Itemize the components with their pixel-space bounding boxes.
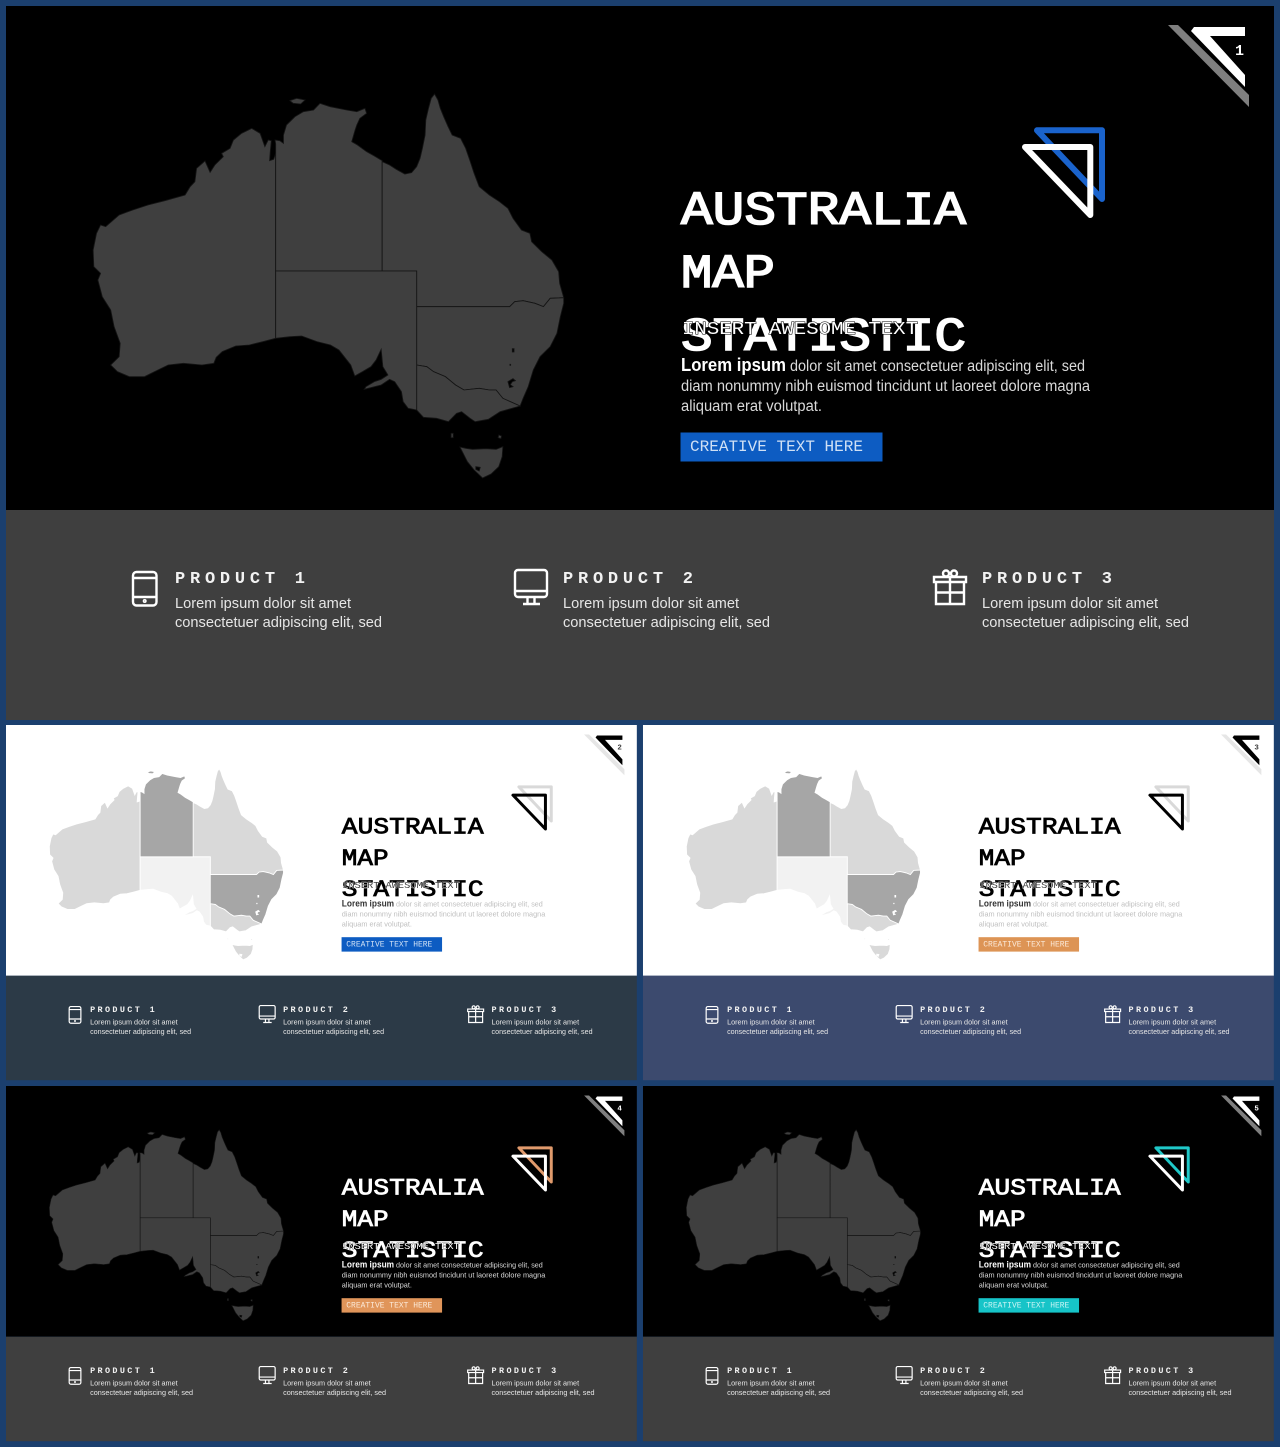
slide 5 product 2: Lorem ipsum dolor sit amet [920, 1378, 1009, 1387]
slide 1 product 3 [934, 570, 1189, 631]
slide 5 product 2 [896, 1366, 1023, 1397]
slide 5 title: AUSTRALIA [979, 1176, 1122, 1202]
slide 2 product 1: Lorem ipsum dolor sit amet [90, 1017, 179, 1026]
slide 3 map of Australia [686, 769, 920, 960]
slide 5 subtitle: INSERT AWESOME TEXT [979, 1242, 1097, 1252]
slide 5 button [979, 1298, 1079, 1313]
slide 5 triangle icon [1150, 1148, 1188, 1190]
icon: monitor [515, 570, 547, 604]
slide 5 title [979, 1176, 1122, 1265]
slide 4: dark slide with orange accent [6, 1086, 637, 1441]
slide 3 product 3 [1105, 1005, 1230, 1036]
slide 5 product 1: PRODUCT 1 [727, 1366, 792, 1376]
slide 4 product 3 [468, 1366, 595, 1397]
slide 1 paragraph: diam nonummy nibh euismod tincidunt ut laoreet dolore magna [681, 378, 1090, 395]
icon: tablet [69, 1007, 81, 1023]
slide 4 product 3: consectetuer adipiscing elit, sed [492, 1388, 595, 1397]
slide 2 footer panel [6, 976, 637, 1080]
slide 3 paragraph: diam nonummy nibh euismod tincidunt ut laoreet dolore magna [979, 910, 1183, 919]
slide 5 footer panel [643, 1337, 1274, 1441]
slide 2 corner emblem: 2 [617, 744, 622, 752]
slide 1 title: STATISTIC [681, 312, 966, 365]
slide 4 corner emblem: 4 [617, 1105, 622, 1113]
slide 2 product 2: consectetuer adipiscing elit, sed [283, 1027, 384, 1036]
slide 5 map of Australia [686, 1130, 920, 1321]
slide 3 button [979, 937, 1079, 952]
slide 2 paragraph: diam nonummy nibh euismod tincidunt ut laoreet dolore magna [342, 910, 546, 919]
slide 4 product 2: PRODUCT 2 [283, 1366, 348, 1376]
slide 3 paragraph: dolor sit amet consectetuer adipiscing elit, sed [1033, 900, 1180, 909]
slide 4 paragraph [342, 1260, 546, 1289]
slide 3 top panel [643, 725, 1274, 976]
slide 5 title: STATISTIC [979, 1239, 1121, 1265]
slide 2 map of Australia [49, 769, 283, 960]
slide 4 paragraph: dolor sit amet consectetuer adipiscing elit, sed [396, 1261, 543, 1270]
slide 2 product 3: consectetuer adipiscing elit, sed [492, 1027, 593, 1036]
slide 5 product 3: consectetuer adipiscing elit, sed [1129, 1388, 1232, 1397]
slide 2 corner emblem [584, 734, 624, 775]
slide 4 triangle icon [513, 1148, 551, 1190]
slide 4 paragraph: diam nonummy nibh euismod tincidunt ut laoreet dolore magna [342, 1271, 546, 1280]
slide 1 button: CREATIVE TEXT HERE [690, 438, 863, 456]
slide 5 product 1: Lorem ipsum dolor sit amet [727, 1378, 816, 1387]
icon: gift [1105, 1006, 1121, 1023]
slide 2 triangle icon [513, 787, 551, 829]
slide 2 paragraph [342, 899, 546, 928]
icon: tablet [69, 1368, 81, 1384]
slide 3 button: CREATIVE TEXT HERE [983, 940, 1070, 949]
slide 4 product 3: PRODUCT 3 [492, 1366, 556, 1376]
slide 3 product 1 [706, 1005, 828, 1036]
slide 3 product 3: Lorem ipsum dolor sit amet [1129, 1017, 1217, 1026]
slide 2 title: STATISTIC [342, 878, 484, 904]
slide 3 title [979, 815, 1122, 904]
slide 3 product 3: consectetuer adipiscing elit, sed [1129, 1027, 1230, 1036]
slide 2 product 1 [69, 1005, 191, 1036]
slide 5 corner emblem [1221, 1095, 1261, 1136]
icon: tablet [706, 1007, 718, 1023]
slide 2 button [342, 937, 442, 952]
slide 4 product 1: consectetuer adipiscing elit, sed [90, 1388, 193, 1397]
slide 4 paragraph: aliquam erat volutpat. [342, 1280, 412, 1289]
slide 5 paragraph: Lorem ipsum [979, 1260, 1031, 1270]
icon: gift [468, 1006, 484, 1023]
slide 1 product 1 [133, 570, 382, 631]
slide 1 corner emblem: 1 [1235, 43, 1244, 60]
slide 5 paragraph: diam nonummy nibh euismod tincidunt ut laoreet dolore magna [979, 1271, 1183, 1280]
slide 3 product 3: PRODUCT 3 [1129, 1005, 1193, 1015]
slide 3 product 2: consectetuer adipiscing elit, sed [920, 1027, 1021, 1036]
slide 2 product 1: PRODUCT 1 [90, 1005, 155, 1015]
slide 3 subtitle: INSERT AWESOME TEXT [979, 881, 1097, 891]
slide 2 product 3: PRODUCT 3 [492, 1005, 556, 1015]
slide 4 map of Australia [49, 1130, 283, 1321]
slide 1 map of Australia [93, 94, 564, 478]
slide 1 product 3: Lorem ipsum dolor sit amet [982, 595, 1159, 612]
slide 5 paragraph: aliquam erat volutpat. [979, 1280, 1049, 1289]
slide 2 title [342, 815, 485, 904]
slide 2 title: AUSTRALIA [342, 815, 485, 841]
icon: monitor [896, 1006, 912, 1023]
slide 3 title: AUSTRALIA [979, 815, 1122, 841]
slide 4 product 3: Lorem ipsum dolor sit amet [492, 1378, 580, 1387]
slide 1 product 2: consectetuer adipiscing elit, sed [563, 614, 770, 631]
slide 2 top panel [6, 725, 637, 976]
slide 4 title: STATISTIC [342, 1239, 484, 1265]
icon: tablet [706, 1368, 718, 1384]
slide 4 subtitle: INSERT AWESOME TEXT [342, 1242, 460, 1252]
slide 2 paragraph: aliquam erat volutpat. [342, 919, 412, 928]
slide 3 footer panel [643, 976, 1274, 1080]
icon: gift [934, 570, 966, 604]
slide 1 subtitle: INSERT AWESOME TEXT [682, 320, 918, 340]
slide 1 product 2 [515, 570, 770, 631]
slide 5 product 2: consectetuer adipiscing elit, sed [920, 1388, 1023, 1397]
slide 3 paragraph: aliquam erat volutpat. [979, 919, 1049, 928]
slide 3 title: STATISTIC [979, 878, 1121, 904]
slide 3 title: MAP [979, 847, 1026, 873]
slide 1 title [681, 186, 967, 365]
slide 4 button: CREATIVE TEXT HERE [346, 1301, 433, 1310]
slide 3 paragraph: Lorem ipsum [979, 899, 1031, 909]
slide 4 footer panel [6, 1337, 637, 1441]
slide 1 title: MAP [681, 249, 775, 302]
slide 5 product 2: PRODUCT 2 [920, 1366, 985, 1376]
slide 4 paragraph: Lorem ipsum [342, 1260, 394, 1270]
slide 2 product 2: PRODUCT 2 [283, 1005, 348, 1015]
slide 5 paragraph [979, 1260, 1183, 1289]
slide 5 product 1: consectetuer adipiscing elit, sed [727, 1388, 830, 1397]
slide 4 button [342, 1298, 442, 1313]
slide 1 product 3: PRODUCT 3 [982, 570, 1112, 589]
slide 1 paragraph [681, 355, 1090, 415]
slide 4 product 1 [69, 1366, 193, 1397]
slide 1 footer panel [6, 510, 1274, 720]
slide 4 title [342, 1176, 485, 1265]
slide 2 paragraph: Lorem ipsum [342, 899, 394, 909]
slide 1 product 1: Lorem ipsum dolor sit amet [175, 595, 352, 612]
slide 4 top panel [6, 1086, 637, 1337]
slide 4 corner emblem [584, 1095, 624, 1136]
slide 5 product 3: PRODUCT 3 [1129, 1366, 1193, 1376]
slide 4 title: MAP [342, 1208, 389, 1234]
slide 1 triangle icon [1025, 130, 1102, 215]
slide 3 product 1: PRODUCT 1 [727, 1005, 792, 1015]
slide 2 product 1: consectetuer adipiscing elit, sed [90, 1027, 191, 1036]
slide 3 product 2 [896, 1005, 1021, 1036]
slide 2 product 3: Lorem ipsum dolor sit amet [492, 1017, 580, 1026]
slide 3 corner emblem: 3 [1254, 744, 1259, 752]
icon: gift [468, 1367, 484, 1384]
slide 4 title: AUSTRALIA [342, 1176, 485, 1202]
icon: monitor [259, 1367, 275, 1384]
slide 1 paragraph: dolor sit amet consectetuer adipiscing elit, sed [790, 358, 1085, 375]
slide 5 product 3 [1105, 1366, 1232, 1397]
slide 1 button [680, 432, 882, 462]
slide 5 product 1 [706, 1366, 830, 1397]
slide 5 paragraph: dolor sit amet consectetuer adipiscing elit, sed [1033, 1261, 1180, 1270]
slide 3: white slide with indigo footer [643, 725, 1274, 1080]
slide 4 product 2 [259, 1366, 386, 1397]
slide 1 product 2: PRODUCT 2 [563, 570, 693, 589]
slide 5 title: MAP [979, 1208, 1026, 1234]
slide 1 product 2: Lorem ipsum dolor sit amet [563, 595, 740, 612]
slide 2 product 3 [468, 1005, 593, 1036]
slide 5: dark slide with teal accent [643, 1086, 1274, 1441]
slide 1 paragraph: Lorem ipsum [681, 355, 786, 375]
slide 2 paragraph: dolor sit amet consectetuer adipiscing elit, sed [396, 900, 543, 909]
slide 3 product 2: PRODUCT 2 [920, 1005, 985, 1015]
slide 5 button: CREATIVE TEXT HERE [983, 1301, 1070, 1310]
slide 1 paragraph: aliquam erat volutpat. [681, 398, 822, 415]
icon: monitor [259, 1006, 275, 1023]
slide 4 product 2: Lorem ipsum dolor sit amet [283, 1378, 372, 1387]
icon: gift [1105, 1367, 1121, 1384]
slide 2: white slide with slate footer [6, 725, 637, 1080]
slide 4 product 1: Lorem ipsum dolor sit amet [90, 1378, 179, 1387]
slide 2 product 2 [259, 1005, 384, 1036]
icon: tablet [133, 572, 156, 606]
slide 3 triangle icon [1150, 787, 1188, 829]
slide 1 product 3: consectetuer adipiscing elit, sed [982, 614, 1189, 631]
slide 3 corner emblem [1221, 734, 1261, 775]
slide 1 corner emblem [1168, 25, 1249, 107]
slide 2 title: MAP [342, 847, 389, 873]
slide 2 subtitle: INSERT AWESOME TEXT [342, 881, 460, 891]
slide 3 product 1: consectetuer adipiscing elit, sed [727, 1027, 828, 1036]
slide 3 product 1: Lorem ipsum dolor sit amet [727, 1017, 816, 1026]
slide 5 top panel [643, 1086, 1274, 1337]
icon: monitor [896, 1367, 912, 1384]
slide 4 product 2: consectetuer adipiscing elit, sed [283, 1388, 386, 1397]
slide 1 product 1: PRODUCT 1 [175, 570, 305, 589]
slide 5 product 3: Lorem ipsum dolor sit amet [1129, 1378, 1217, 1387]
slide 1: large dark slide [6, 6, 1274, 720]
slide 1 top panel [6, 6, 1274, 510]
slide 3 product 2: Lorem ipsum dolor sit amet [920, 1017, 1009, 1026]
slide 1 product 1: consectetuer adipiscing elit, sed [175, 614, 382, 631]
slide 2 product 2: Lorem ipsum dolor sit amet [283, 1017, 372, 1026]
slide 4 product 1: PRODUCT 1 [90, 1366, 155, 1376]
slide 3 paragraph [979, 899, 1183, 928]
slide 5 corner emblem: 5 [1254, 1105, 1259, 1113]
slide 2 button: CREATIVE TEXT HERE [346, 940, 433, 949]
slide 1 title: AUSTRALIA [681, 186, 967, 239]
